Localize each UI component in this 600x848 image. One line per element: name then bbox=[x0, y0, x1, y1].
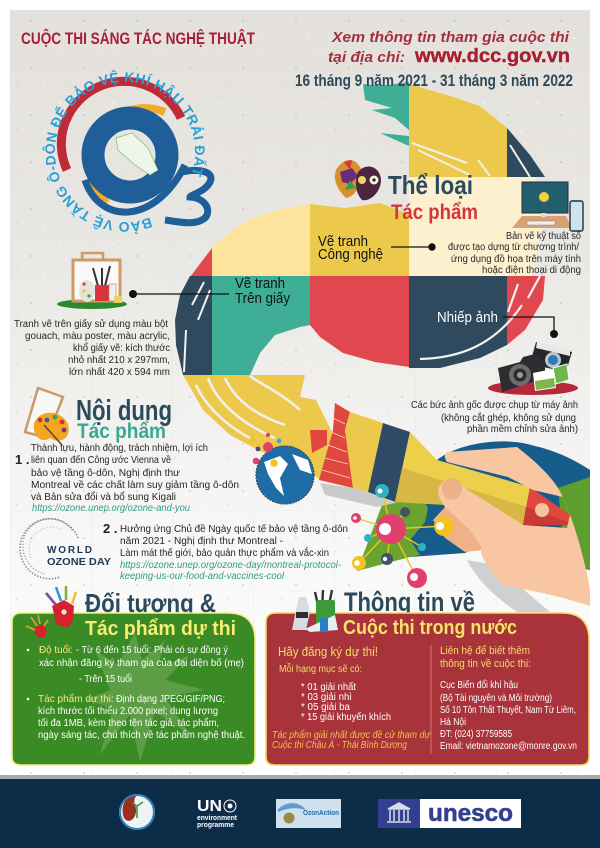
logo circular text: BẢO VỆ TẦNG Ô-DÔN ĐỂ BẢO VỆ KHÍ HẬU TRÁI ĐẤT bbox=[42, 70, 207, 234]
label: Vẽ tranh Công nghệ: Vẽ tranh bbox=[318, 233, 368, 250]
text: prizes: Tác phẩm giải nhất được đề cử tham dự bbox=[272, 729, 431, 741]
heading: Thể loại tác phẩm: Tác phẩm bbox=[391, 201, 478, 224]
text: age requirements: - Từ 6 đến 15 tuổi: Phải có sự đồng ý bbox=[76, 644, 228, 656]
logo: UN environment programme: programme bbox=[197, 822, 234, 829]
text: digital art description: được tạo dựng từ chương trình/ bbox=[448, 242, 579, 253]
text: content item 2: 2 . bbox=[103, 521, 117, 536]
logo: UNESCO bbox=[378, 799, 521, 828]
text: content item 2: Làm mát thế giới, bảo quản thực phẩm và vắc-xin bbox=[120, 546, 329, 559]
brush stroke shape bbox=[175, 82, 545, 480]
text: prizes: Cuộc thi Châu Á - Thái Bình Dương bbox=[272, 738, 407, 751]
heading: Nội dung tác phẩm: Nội dung bbox=[76, 395, 172, 427]
text: content item 2: năm 2021 - Nghị định thư Montreal - bbox=[120, 536, 283, 547]
logo: OzonAction bbox=[276, 799, 341, 828]
logo: ministry emblem bbox=[119, 794, 155, 830]
label: Vẽ tranh Trên giấy bbox=[129, 275, 290, 307]
heading: Thể loại tác phẩm bbox=[388, 170, 478, 224]
text: content item 1: Thành tựu, hành động, trách nhiệm, lợi ích bbox=[31, 443, 208, 454]
heading: Thể loại tác phẩm: Thể loại bbox=[388, 170, 473, 200]
panel: national contest bbox=[266, 590, 589, 765]
text: digital art description: hoặc điện thoại di động bbox=[482, 265, 581, 276]
text: content item 1: Montreal về các chất làm suy giảm tầng ô-dôn bbox=[31, 479, 239, 491]
label: Vẽ tranh Trên giấy: Trên giấy bbox=[235, 290, 290, 307]
participation info bbox=[295, 30, 573, 90]
text: contact bbox=[440, 645, 577, 752]
label: Vẽ tranh Trên giấy: Vẽ tranh bbox=[235, 275, 285, 292]
text: content item 2: keeping-us-our-food-and-vaccines-cool bbox=[120, 571, 285, 582]
text: paper art description: lớn nhất 420 x 594 mm bbox=[69, 366, 170, 378]
text: content item 1: và Bản sửa đổi và bổ sung Kigali bbox=[31, 491, 176, 503]
illustration: globes bbox=[357, 441, 590, 571]
panel: participants and works bbox=[12, 586, 255, 765]
text: contact: Liên hệ để biết thêm bbox=[440, 645, 530, 657]
text: contact: (Bộ Tài nguyên và Môi trường) bbox=[440, 693, 552, 704]
logo: UNESCO: unesco bbox=[428, 800, 513, 827]
icon: paint supplies bbox=[292, 590, 338, 632]
text: prizes: * 01 giải nhất bbox=[301, 681, 356, 693]
logo: World Ozone Day bbox=[20, 519, 111, 579]
participation info: tại địa chỉ: bbox=[328, 50, 405, 66]
text: contact: ĐT: (024) 37759585 bbox=[440, 729, 512, 740]
footer bbox=[0, 775, 600, 848]
participation info: www.dcc.gov.vn bbox=[414, 46, 570, 67]
participation info: Xem thông tin tham gia cuộc thi bbox=[331, 30, 570, 46]
icon: cameras bbox=[488, 342, 578, 395]
label: Nhiếp ảnh: Nhiếp ảnh bbox=[437, 309, 498, 326]
text: contact: thông tin về cuộc thi: bbox=[440, 658, 531, 670]
text: age requirements: - Trên 15 tuổi bbox=[79, 673, 132, 685]
text: content item 2 bbox=[103, 521, 348, 582]
logo: ozone emblem bbox=[42, 70, 214, 234]
illustration: network nodes bbox=[351, 484, 454, 588]
text: prizes: * 05 giải ba bbox=[301, 702, 350, 713]
text: photography description: Các bức ảnh gốc được chụp từ máy ảnh bbox=[411, 399, 578, 411]
panel: national contest: Cuộc thi trong nước bbox=[343, 617, 517, 639]
text: paper art description bbox=[14, 318, 170, 378]
text: content item 1: liên quan đến Công ước Vienna về bbox=[31, 454, 171, 466]
text: prizes bbox=[272, 645, 431, 751]
logo: World Ozone Day: OZONE DAY bbox=[47, 557, 111, 568]
text: age requirements: xác nhận đăng ký tham gia của đại diện bố (mẹ) bbox=[39, 657, 244, 669]
text: prizes: * 03 giải nhì bbox=[301, 692, 352, 703]
illustration: hand bbox=[433, 447, 590, 612]
icon: computer bbox=[512, 182, 583, 231]
title: CUỘC THI SÁNG TÁC NGHỆ THUẬT bbox=[21, 29, 255, 48]
text: contact: Hà Nội bbox=[440, 717, 466, 728]
text: digital art description: Bản vẽ kỹ thuật số bbox=[506, 230, 581, 242]
text: contact: Email: vietnamozone@monre.gov.vn bbox=[440, 741, 577, 752]
icon: hand prints bbox=[26, 586, 76, 638]
label: Vẽ tranh Công nghệ: Công nghệ bbox=[318, 246, 383, 263]
text: work requirements: tối đa 1MB, kèm theo tên tác giả, tác phẩm, bbox=[38, 717, 219, 729]
logo: UN environment programme bbox=[197, 798, 238, 829]
heading: Thông tin về: Thông tin về bbox=[344, 587, 475, 617]
text: work requirements: Tác phẩm dự thi bbox=[38, 693, 111, 705]
text: paper art description: Tranh vẽ trên giấy sử dụng màu bột bbox=[14, 318, 168, 330]
panel: participants and works: Tác phẩm dự thi bbox=[85, 618, 236, 640]
text: prizes: Mỗi hạng mục sẽ có: bbox=[279, 662, 362, 675]
text: paper art description: khổ giấy vẽ: kích thước bbox=[73, 342, 170, 354]
label: Nhiếp ảnh bbox=[437, 309, 558, 338]
text: content item 1: 1 . bbox=[15, 452, 29, 467]
text: work requirements: ngày sáng tác, chú thích về tác phẩm nghệ thuật. bbox=[38, 729, 245, 741]
text: prizes: Hãy đăng ký dự thi! bbox=[278, 645, 378, 659]
text: prizes: * 15 giải khuyến khích bbox=[301, 711, 391, 723]
text: photography description: (không cắt ghép, không sử dụng bbox=[441, 411, 576, 424]
text: paper art description: gouach, màu poster, màu acrylic, bbox=[25, 331, 170, 342]
icon: paint case bbox=[57, 253, 127, 309]
text: age requirements bbox=[27, 644, 244, 685]
logo: OzonAction: OzonAction bbox=[303, 808, 339, 817]
heading: Đối tượng: Đối tượng & bbox=[85, 588, 216, 618]
text: contact: Cục Biến đổi khí hậu bbox=[440, 679, 518, 691]
text: content item 2: https://ozone.unep.org/ozone-day/montreal-protocol- bbox=[120, 560, 342, 571]
text: age requirements: Độ tuổi: bbox=[39, 644, 73, 656]
icon: easel and palette bbox=[25, 388, 69, 445]
text: digital art description: ứng dụng đồ họa trên máy tính bbox=[451, 253, 581, 265]
text: work requirements: kích thước tối thiểu 2.000 pixel; dung lượng bbox=[38, 705, 218, 717]
icon: small globe with nodes bbox=[251, 433, 314, 504]
text: work requirements bbox=[27, 693, 245, 741]
text: digital art description bbox=[448, 230, 581, 276]
text: paper art description: nhỏ nhất 210 x 297mm, bbox=[68, 354, 170, 366]
icon: masks bbox=[335, 160, 381, 200]
logo: World Ozone Day: WORLD bbox=[47, 545, 92, 556]
text: work requirements: : Định dạng JPEG/GIF/PNG; bbox=[111, 694, 225, 705]
heading: Nội dung tác phẩm bbox=[76, 395, 172, 443]
text: content item 1: bảo vệ tầng ô-dôn, Nghị định thư bbox=[31, 467, 180, 479]
heading: Nội dung tác phẩm: Tác phẩm bbox=[77, 420, 166, 443]
text: content item 1 bbox=[15, 443, 239, 514]
logo: UN environment programme: environment bbox=[197, 815, 238, 822]
text: content item 1: https://ozone.unep.org/ozone-and-you bbox=[32, 503, 190, 514]
text: photography description bbox=[411, 399, 578, 435]
illustration: paint brush bbox=[310, 403, 570, 525]
logo: UN environment programme: UN bbox=[197, 798, 222, 815]
text: photography description: phần mềm chỉnh sửa ảnh) bbox=[467, 423, 578, 435]
label: Vẽ tranh Công nghệ bbox=[318, 233, 436, 263]
text: content item 2: Hưởng ứng Chủ đề Ngày quốc tế bảo vệ tầng ô-dôn bbox=[120, 523, 348, 535]
